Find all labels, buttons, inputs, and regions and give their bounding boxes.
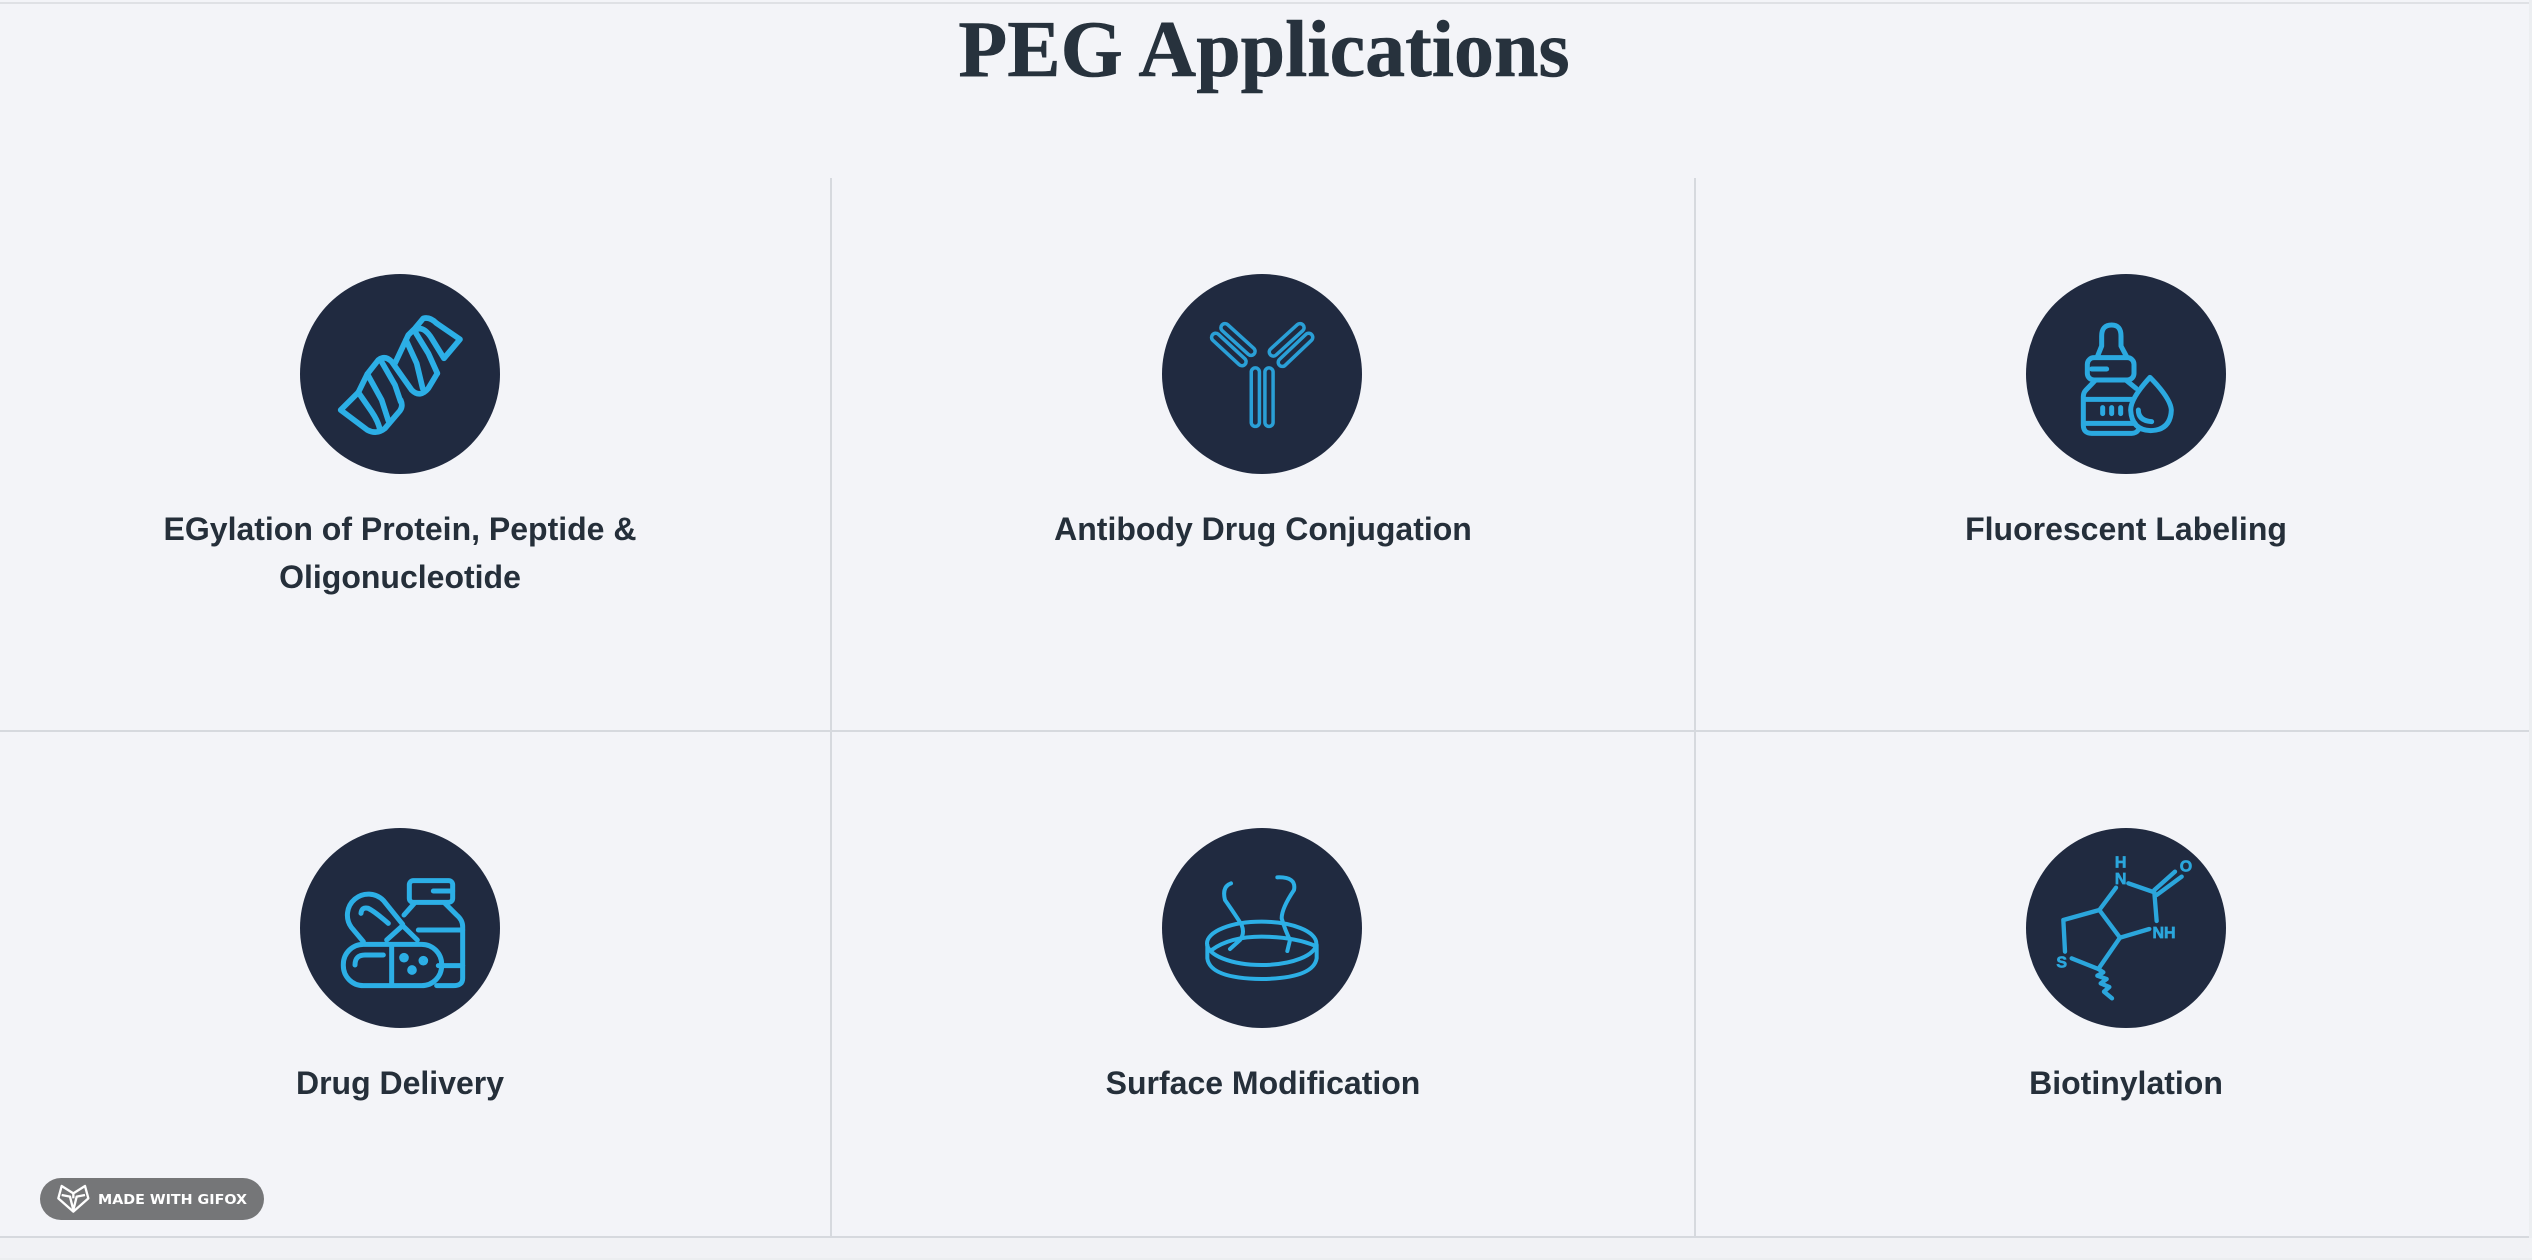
label: Surface Modification: Surface Modification (1106, 1065, 1420, 1101)
panel: Drug Delivery (296, 828, 504, 1101)
label: PEGylation: EGylation of Protein, Peptide & (164, 511, 636, 547)
label: Fluorescent Labeling: Fluorescent Labeling (1965, 511, 2287, 547)
icon: biotin molecule: S (2056, 955, 2067, 972)
icon: petri dish (1162, 828, 1362, 1028)
label: Antibody Drug Conjugation: Antibody Drug Conjugation (1054, 511, 1472, 547)
icon: biotin molecule: H (2115, 855, 2126, 872)
icon: biotin molecule: NH (2152, 925, 2176, 942)
panel: Surface Modification (1106, 828, 1420, 1101)
label: Biotinylation: Biotinylation (2029, 1065, 2223, 1101)
watermark badge (40, 1178, 264, 1220)
panel: PEGylation (164, 274, 636, 595)
icon: biotin molecule: N (2115, 871, 2126, 888)
icon: biotin molecule (2026, 828, 2226, 1028)
icon: antibody (1162, 274, 1362, 474)
icon: DNA ribbon (300, 274, 500, 474)
icon: pills and bottle (300, 828, 500, 1028)
icon: dropper bottle (2026, 274, 2226, 474)
panel: Fluorescent Labeling (1965, 274, 2287, 547)
panel: Biotinylation (2026, 828, 2226, 1101)
icon: biotin molecule: O (2180, 858, 2192, 875)
label: Drug Delivery: Drug Delivery (296, 1065, 504, 1101)
badge text: MADE WITH GIFOX (98, 1193, 247, 1208)
panel: Antibody Drug Conjugation (1054, 274, 1472, 547)
title: PEG Applications (958, 6, 1570, 94)
label: PEGylation: Oligonucleotide (279, 559, 521, 595)
icon: fox (58, 1186, 88, 1212)
